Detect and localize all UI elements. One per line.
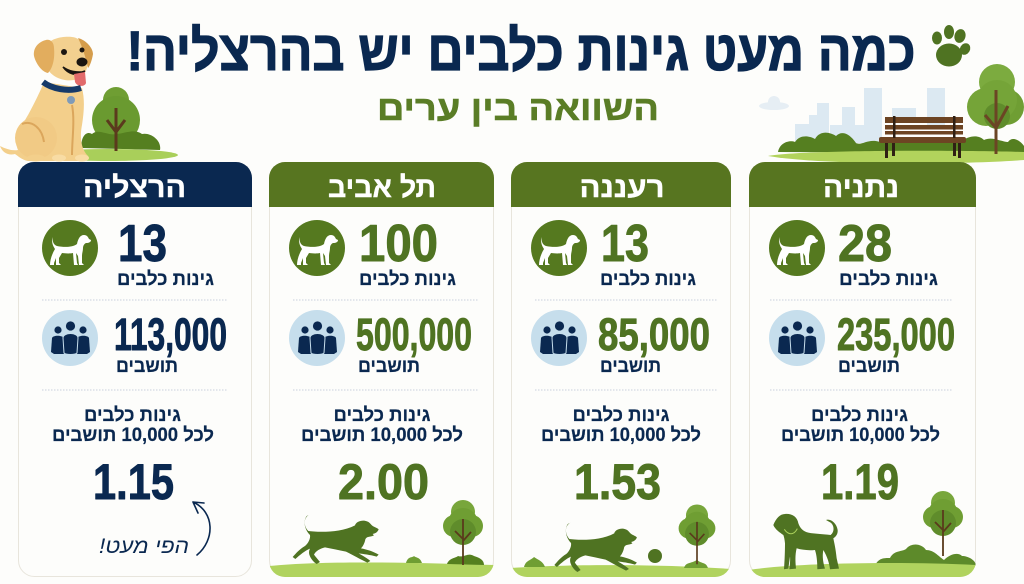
ratio label: לכל 10,000 תושבים bbox=[541, 425, 701, 446]
illustration: park scene with bench and skyline bbox=[759, 64, 1024, 163]
dog parks count: 13 bbox=[601, 215, 649, 273]
icon: dog bbox=[531, 220, 587, 276]
ratio label: גינות כלבים bbox=[334, 405, 430, 426]
illustration: standing dog, tree and bushes bbox=[749, 491, 976, 577]
residents count bbox=[837, 309, 955, 377]
dog parks count: 28 bbox=[838, 215, 892, 273]
ratio label bbox=[52, 405, 214, 446]
ratio label: גינות כלבים bbox=[572, 405, 670, 426]
panel: Netanya bbox=[749, 162, 976, 577]
residents count: תושבים bbox=[838, 356, 900, 377]
panel header: Raanana bbox=[511, 162, 731, 207]
icon: residents bbox=[769, 310, 825, 366]
ratio value: 1.53 bbox=[574, 454, 661, 510]
dog parks count: גינות כלבים bbox=[359, 269, 456, 290]
panel header: Raanana: רעננה bbox=[580, 172, 664, 204]
ratio label bbox=[781, 405, 940, 446]
residents count: תושבים bbox=[116, 356, 178, 377]
ratio label: לכל 10,000 תושבים bbox=[781, 425, 940, 446]
callout: the least bbox=[99, 502, 210, 558]
ratio value: 2.00 bbox=[338, 454, 429, 510]
callout: the least: הפי מעט! bbox=[99, 535, 189, 558]
dog parks count: גינות כלבים bbox=[600, 269, 696, 290]
dog parks count bbox=[359, 215, 456, 290]
dog parks count bbox=[600, 215, 696, 290]
icon: dog bbox=[289, 220, 345, 276]
residents count bbox=[114, 309, 227, 377]
residents count bbox=[598, 309, 710, 377]
panel header: Tel Aviv: תל אביב bbox=[328, 172, 436, 204]
dog parks count: גינות כלבים bbox=[117, 269, 214, 290]
icon: residents bbox=[42, 310, 98, 366]
residents count: תושבים bbox=[600, 356, 661, 377]
dog parks count: 100 bbox=[359, 215, 438, 273]
panel header: Herzliya bbox=[18, 162, 252, 207]
ratio label bbox=[301, 405, 463, 446]
ratio label bbox=[541, 405, 701, 446]
subtitle: השוואה בין ערים bbox=[377, 89, 659, 128]
residents count: 500,000 bbox=[356, 309, 472, 360]
icon: residents bbox=[531, 310, 587, 366]
panel: Raanana bbox=[511, 162, 731, 577]
panel: Tel Aviv bbox=[269, 162, 494, 577]
title: כמה מעט גינות כלבים יש בהרצליה! bbox=[126, 19, 916, 82]
icon: dog bbox=[769, 220, 825, 276]
residents count bbox=[356, 309, 472, 377]
dog parks count bbox=[117, 215, 214, 290]
ratio label: גינות כלבים bbox=[84, 405, 181, 426]
dog parks count bbox=[838, 215, 938, 290]
ratio value: 1.19 bbox=[821, 454, 899, 510]
dog parks count: 13 bbox=[118, 215, 167, 273]
panel: Herzliya bbox=[18, 162, 252, 576]
panel header: Herzliya: הרצליה bbox=[83, 172, 186, 204]
icon: residents bbox=[289, 310, 345, 366]
icon: paw print bbox=[932, 25, 972, 66]
ratio label: גינות כלבים bbox=[811, 405, 908, 426]
panel header: Tel Aviv bbox=[269, 162, 494, 207]
residents count: תושבים bbox=[358, 356, 420, 377]
panel header: Netanya bbox=[749, 162, 976, 207]
residents count: 113,000 bbox=[114, 309, 227, 360]
residents count: 235,000 bbox=[837, 309, 955, 360]
illustration: running dog and tree bbox=[269, 500, 494, 577]
residents count: 85,000 bbox=[598, 309, 710, 360]
illustration: labrador dog in a park bbox=[0, 37, 178, 162]
icon: dog bbox=[42, 220, 98, 276]
arrow bbox=[193, 502, 210, 555]
ratio value: 1.15 bbox=[93, 454, 174, 510]
panel header: Netanya: נתניה bbox=[823, 172, 899, 204]
ratio label: לכל 10,000 תושבים bbox=[301, 425, 463, 446]
dog parks count: גינות כלבים bbox=[839, 269, 938, 290]
illustration: dog chasing ball and tree bbox=[511, 504, 731, 577]
ratio label: לכל 10,000 תושבים bbox=[52, 425, 214, 446]
